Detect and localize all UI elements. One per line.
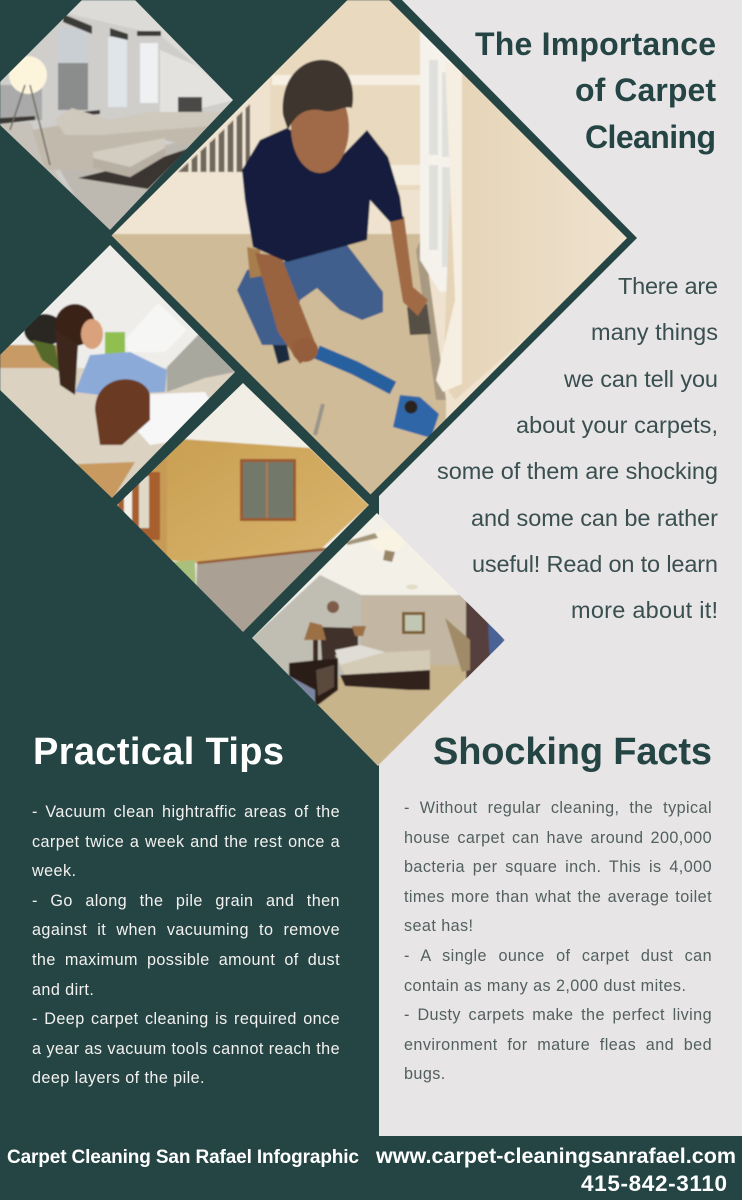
photo: technician stretching carpet <box>100 0 640 500</box>
practical tips text: - Vacuum clean hightraffic areas of the <box>32 803 340 821</box>
shocking facts text: - Dusty carpets make the perfect living <box>404 1006 712 1024</box>
intro text: about your carpets, <box>516 412 718 438</box>
practical tips text: carpet twice a week and the rest once a <box>32 833 340 851</box>
shocking facts text: - A single ounce of carpet dust can <box>404 947 712 965</box>
intro text: we can tell you <box>563 366 718 392</box>
intro text: There are <box>618 273 718 299</box>
shocking facts text: contain as many as 2,000 dust mites. <box>404 977 686 995</box>
photo: family doing sit-ups on carpet <box>0 240 240 503</box>
title: The Importance <box>475 26 716 62</box>
photo: bedroom <box>250 510 510 770</box>
footer <box>7 1144 736 1196</box>
shocking facts text: bugs. <box>404 1065 446 1083</box>
technician <box>237 60 428 364</box>
title: of Carpet <box>575 72 716 108</box>
intro text: and some can be rather <box>471 505 718 531</box>
shocking facts text <box>404 799 712 1083</box>
intro text <box>437 273 718 623</box>
light background panel <box>379 0 742 1136</box>
photo: empty room with window <box>117 383 369 632</box>
practical tips text: against it when vacuuming to remove <box>32 921 340 939</box>
shocking facts text: times more than what the average toilet <box>404 888 712 906</box>
practical tips text: - Go along the pile grain and then <box>32 892 340 910</box>
heading: practical tips: Practical Tips <box>33 731 284 773</box>
shocking facts text: - Without regular cleaning, the typical <box>404 799 712 817</box>
practical tips text: - Deep carpet cleaning is required once <box>32 1010 340 1028</box>
heading: shocking facts: Shocking Facts <box>433 731 712 773</box>
tool: carpet kicker <box>270 304 439 438</box>
intro text: many things <box>591 319 718 345</box>
practical tips text: a year as vacuum tools cannot reach the <box>32 1040 340 1058</box>
practical tips text: and dirt. <box>32 981 94 999</box>
practical tips text: deep layers of the pile. <box>32 1069 205 1087</box>
title <box>475 26 716 155</box>
shocking facts text: bacteria per square inch. This is 4,000 <box>404 858 712 876</box>
shocking facts text: house carpet can have around 200,000 <box>404 829 712 847</box>
intro text: more about it! <box>571 597 718 623</box>
photo: living room with sofa <box>0 0 240 240</box>
intro text: some of them are shocking <box>437 458 718 484</box>
practical tips text: week. <box>32 862 76 880</box>
footer: Carpet Cleaning San Rafael Infographic <box>7 1147 359 1168</box>
footer: www.carpet-cleaningsanrafael.com <box>375 1144 736 1168</box>
title: Cleaning <box>585 119 716 155</box>
practical tips text <box>32 803 340 1087</box>
shocking facts text: environment for mature fleas and bed <box>404 1036 712 1054</box>
footer: 415-842-3110 <box>581 1171 727 1196</box>
intro text: useful! Read on to learn <box>472 551 718 577</box>
practical tips text: the maximum possible amount of dust <box>32 951 340 969</box>
shocking facts text: seat has! <box>404 917 473 935</box>
